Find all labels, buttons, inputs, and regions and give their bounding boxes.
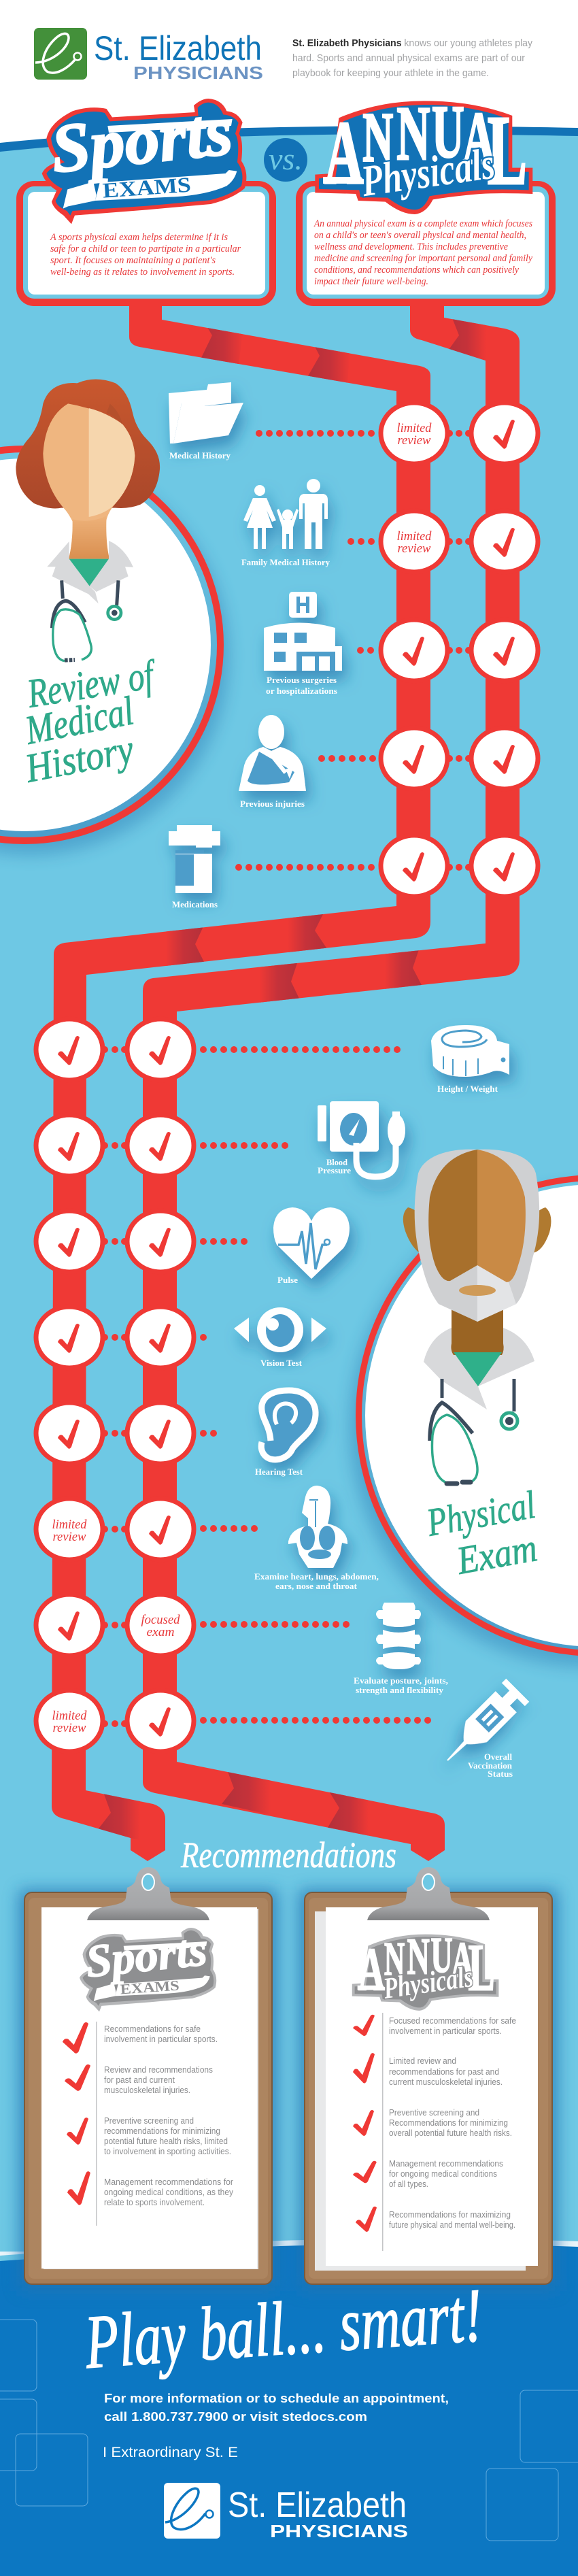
footer logo: PHYSICIANS: [270, 2521, 408, 2541]
character: female doctor: [16, 379, 160, 661]
male doctor stethoscope: [430, 1379, 517, 1484]
heading: Physical Exam: [423, 1482, 540, 1583]
recommendation list: for past and current: [104, 2075, 175, 2085]
recommendation list: overall potential future health risks.: [389, 2128, 512, 2138]
logo: St. Elizabeth Physicians: PHYSICIANS: [133, 63, 263, 83]
icon: vaccination syringe: Status: [488, 1769, 513, 1779]
connector dots: physical exam rows: [101, 1046, 438, 1727]
panel: sports exams description: well-being as it relates to involvement in sports.: [50, 267, 235, 278]
recommendation list: ongoing medical conditions, as they: [104, 2188, 234, 2197]
panel: sports exams clipboard: [24, 1867, 272, 2284]
recommendation list: Recommendations for safe: [104, 2024, 201, 2034]
panel: annual physicals description: on a child's or teen's overall physical and mental health,: [314, 230, 526, 241]
panel: annual physicals description: conditions, and recommendations which can positively: [314, 265, 519, 275]
male doctor head: [415, 1150, 539, 1322]
badge: vs.: [264, 138, 307, 182]
checklist marks: [353, 2015, 377, 2232]
logo: St. Elizabeth Physicians: St. Elizabeth: [94, 29, 262, 67]
icon: vision test eye: Vision Test: [260, 1358, 303, 1368]
gray sports logo: Sports: [83, 1923, 209, 1987]
recommendation list: Preventive screening and: [104, 2116, 194, 2126]
male doctor collar: [424, 1328, 534, 1409]
heading: Physical Exam: Exam: [453, 1525, 540, 1583]
recommendation list: involvement in particular sports.: [104, 2035, 218, 2044]
heading: Review of Medical History: Review of: [24, 652, 160, 716]
icon: medical history folder: [169, 382, 243, 461]
contact text: [104, 2392, 449, 2424]
panel: sports exams description: safe for a child or teen to partipate in a particular: [50, 244, 241, 254]
intro text: playbook for keeping your athlete in the game.: [292, 67, 489, 79]
recommendation list: relate to sports involvement.: [104, 2198, 205, 2207]
intro text: [292, 37, 532, 79]
icon: spine: strength and flexibility: [356, 1685, 443, 1695]
icon: family: [241, 479, 330, 567]
recommendation list: [104, 2024, 234, 2207]
heading: Review of Medical History: [21, 652, 160, 791]
ovals: physical exam sports column: limited: [52, 1518, 87, 1532]
recommendation list: Recommendations for minimizing: [389, 2118, 508, 2128]
clipboard shadows: [19, 1890, 558, 2291]
gray sports logo: EXAMS: [120, 1977, 180, 1997]
list divider: [96, 2022, 97, 2226]
checklist marks: [63, 2022, 90, 2205]
ovals: physical exam annual column: exam: [147, 1625, 174, 1639]
recommendation list: Limited review and: [389, 2056, 456, 2066]
icon: vaccination syringe: [436, 1679, 529, 1779]
heading: Review of Medical History: Medical: [21, 688, 137, 753]
track: sports exams pipe: [52, 303, 430, 1861]
intro text: hard. Sports and annual physical exams are part of our: [292, 52, 525, 64]
icon: hospital: or hospitalizations: [266, 686, 337, 696]
icon: height and weight tape: Height / Weight: [437, 1084, 498, 1094]
heading: Sports Exams logo: EXAMS: [102, 173, 192, 203]
badge: vs.: vs.: [269, 141, 303, 176]
icon: heart, lungs and abdomen: [254, 1486, 379, 1591]
track: annual physicals pipe: [143, 303, 520, 1861]
recommendation list: Preventive screening and: [389, 2108, 479, 2118]
icon: vaccination syringe: Vaccination: [468, 1760, 513, 1771]
icon: medications: [169, 825, 220, 909]
tagline: I Extraordinary St. E: [103, 2445, 238, 2460]
doctor stethoscope: [52, 580, 121, 661]
gray annual logo: U: [430, 1928, 453, 1984]
heading: Review of Medical History: History: [21, 726, 137, 791]
ovals: physical exam sports column: review: [53, 1721, 86, 1735]
icon: blood pressure cuff: Blood: [326, 1157, 348, 1167]
panel: annual physicals description: [296, 181, 556, 306]
icon: hospital: Previous surgeries: [267, 675, 337, 685]
male doctor mouth: [459, 1285, 496, 1296]
male doctor ears: [403, 1207, 551, 1255]
recommendation list: for ongoing medical conditions: [389, 2169, 497, 2179]
ovals: medical history sports column: limited: [397, 421, 432, 435]
icon: height and weight tape: [431, 1025, 509, 1094]
logo: St. Elizabeth Physicians: [34, 28, 263, 83]
recommendation list: [389, 2016, 516, 2230]
circle shadows: [0, 456, 578, 1667]
heading: Annual Physicals logo: U: [432, 90, 464, 173]
panel: annual physicals description: An annual physical exam is a complete exam which focuses: [313, 218, 532, 229]
icon: hearing test ear: [255, 1390, 316, 1477]
panel: annual physicals clipboard: [305, 1867, 552, 2284]
recommendation list: Review and recommendations: [104, 2065, 213, 2075]
recommendation list: to involvement in sporting activities.: [104, 2147, 231, 2156]
panel: sports exams description: [16, 181, 276, 306]
panel: sports exams description: sport. It focuses on maintaining a patient's: [50, 255, 216, 266]
male doctor neck: [451, 1309, 504, 1355]
recommendation list: musculoskeletal injuries.: [104, 2086, 190, 2095]
top blue wave band: [0, 126, 578, 152]
panel: review of medical history circle: [0, 446, 224, 844]
ovals: physical exam sports column: review: [53, 1530, 86, 1544]
male doctor face: [428, 1150, 477, 1281]
footer blue field: [0, 2239, 578, 2576]
doctor face and neck: [43, 403, 135, 559]
icon: family: Family Medical History: [241, 557, 330, 567]
icon: blood pressure cuff: [318, 1101, 405, 1177]
connector dots: medical history rows: [235, 430, 472, 871]
heading: Annual Physicals logo: N: [362, 99, 393, 177]
icon: pulse heart: Pulse: [277, 1275, 298, 1285]
heading: Annual Physicals logo: [315, 90, 532, 214]
recommendation list: Focused recommendations for safe: [389, 2016, 516, 2026]
recommendation list: recommendations for past and: [389, 2067, 499, 2077]
ovals: medical history sports column: limited: [397, 529, 432, 543]
ovals: physical exam annual column: [127, 1019, 194, 1752]
list divider: [382, 2013, 384, 2251]
icon: previous injuries: Previous injuries: [240, 799, 305, 809]
recommendation list: potential future health risks, limited: [104, 2137, 228, 2146]
heading: Annual Physicals logo: N: [396, 92, 430, 176]
icon: pulse heart: [273, 1207, 350, 1285]
ovals: physical exam sports column: [36, 1019, 103, 1752]
icon: blood pressure cuff: Pressure: [318, 1165, 351, 1175]
heading: Physical Exam: Physical: [423, 1482, 539, 1545]
ovals: medical history sports column: review: [397, 433, 431, 448]
gray annual logo: N: [407, 1927, 430, 1985]
heading: Annual Physicals logo: Physicals: [358, 139, 498, 206]
ovals: physical exam sports column: limited: [52, 1709, 87, 1723]
heading: Annual Physicals logo: A: [462, 97, 495, 180]
heading: Recommendations: Recommendations: [180, 1835, 396, 1875]
gray annual logo: A: [358, 1936, 385, 2004]
icon: vaccination syringe: Overall: [484, 1752, 512, 1762]
icon: hearing test ear: Hearing Test: [255, 1467, 303, 1477]
gray annual logo: N: [384, 1934, 405, 1986]
heading: Sports Exams logo: Sports: [48, 92, 236, 187]
panel: annual physicals description: wellness and development. This includes preventive: [314, 241, 508, 252]
ovals: medical history sports column: [381, 403, 447, 897]
panel: annual physicals description: impact their future well-being.: [314, 276, 428, 287]
gray annual logo: A: [452, 1933, 473, 1988]
icon: hospital: [264, 592, 342, 696]
heading: Annual Physicals logo: L: [488, 95, 527, 206]
recommendation list: Management recommendations for: [104, 2177, 233, 2187]
icon: medications: Medications: [172, 899, 218, 909]
ovals: medical history annual column: [471, 403, 538, 897]
footer logo: [164, 2483, 408, 2541]
icon: spine: [354, 1603, 448, 1695]
doctor collar: [47, 541, 133, 603]
gray annual logo: [352, 1927, 498, 2011]
clip: [87, 1867, 209, 1920]
male doctor scrubs: [454, 1352, 502, 1386]
heading: Annual Physicals logo: A: [324, 102, 364, 203]
ovals: medical history sports column: review: [397, 541, 431, 556]
heading: Sports Exams logo: [42, 92, 246, 224]
panel: sports exams description: A sports physical exam helps determine if it is: [50, 232, 228, 243]
clip: [367, 1867, 490, 1920]
recommendation list: future physical and mental well-being.: [389, 2220, 515, 2230]
icon: heart, lungs and abdomen: Examine heart, lungs, abdomen,: [254, 1571, 379, 1582]
character: male doctor: [403, 1150, 551, 1484]
recommendation list: involvement in particular sports.: [389, 2026, 502, 2036]
contact text: For more information or to schedule an appointment,: [104, 2392, 449, 2405]
recommendation list: current musculoskeletal injuries.: [389, 2077, 503, 2087]
doctor hair: [16, 379, 160, 508]
icon: previous injuries: [239, 715, 306, 809]
ovals: physical exam annual column: focused: [141, 1613, 180, 1627]
contact text: call 1.800.737.7900 or visit stedocs.com: [104, 2410, 367, 2424]
icon: heart, lungs and abdomen: ears, nose and throat: [275, 1581, 358, 1591]
track shading chevrons: [97, 316, 486, 1840]
recommendation list: of all types.: [389, 2179, 428, 2189]
icon: spine: Evaluate posture, joints,: [354, 1675, 448, 1686]
recommendation list: Management recommendations: [389, 2159, 503, 2169]
gray annual logo: L: [468, 1930, 495, 2005]
recommendation list: recommendations for minimizing: [104, 2126, 220, 2136]
decorative outlined squares: [0, 2320, 578, 2541]
panel: physical exam circle: [356, 1175, 578, 1656]
icon: vision test eye: [234, 1307, 326, 1368]
gray sports logo: [80, 1923, 216, 2011]
doctor scrubs: [69, 559, 109, 586]
panel: annual physicals description: medicine and screening for important personal and family: [314, 253, 532, 264]
recommendation list: Recommendations for maximizing: [389, 2210, 511, 2220]
footer logo: St. Elizabeth: [228, 2486, 407, 2525]
intro text: St. Elizabeth Physicians knows our young athletes play: [292, 37, 532, 49]
icon: medical history folder: Medical History: [169, 450, 231, 461]
gray annual logo: Physicals: [381, 1960, 475, 2005]
